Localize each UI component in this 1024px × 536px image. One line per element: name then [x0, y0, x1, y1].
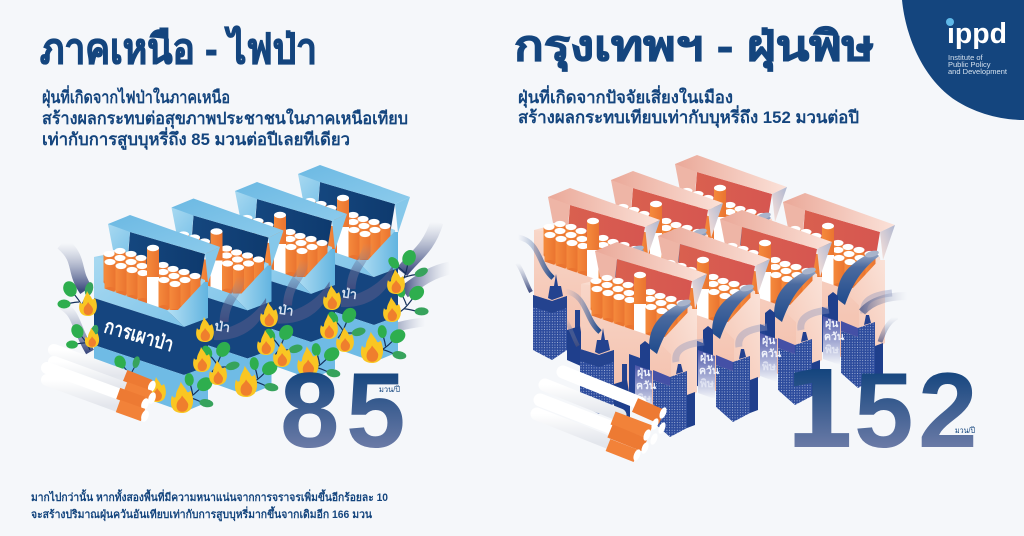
title: north: ภาคเหนือ - ไฟป่า [40, 25, 317, 72]
logo: ippd: Public Policy [948, 60, 991, 69]
number 152: 1 [782, 349, 856, 473]
logo: ippd: Institute of [948, 53, 984, 62]
illustration: forest fire cigarette packs [47, 165, 450, 423]
footnote: มากไปกว่านั้น หากทั้งสองพื้นที่มีความหนาแน่นจากการจราจรเพิ่มขึ้นอีกร้อยละ 10 [31, 489, 388, 504]
city pack front row 4 [752, 193, 895, 388]
logo: ippd: ippd [947, 18, 1007, 50]
pack label: การเผาป่า [102, 316, 176, 356]
cigarette pack 3 [221, 182, 347, 379]
smoke and label on pack 3 [277, 260, 330, 324]
city pack back row 1 [644, 155, 787, 350]
text block: bangkok description [518, 85, 859, 128]
footnote [31, 489, 388, 522]
loose cigarettes [47, 350, 157, 423]
smoke wisps right of city packs [862, 296, 907, 342]
number 152: 2 [918, 350, 978, 470]
footnote: จะสร้างปริมาณฝุ่นควันอันเทียบเท่ากับการสูบบุหรี่มากขึ้นจากเดิมอีก 166 มวน [31, 506, 372, 522]
text block: north description [42, 85, 408, 151]
smoke and label on pack 4 [341, 243, 393, 307]
text block: bangkok description: สร้างผลกระทบเทียบเท่ากับบุหรี่ถึง 152 มวนต่อปี [518, 105, 859, 128]
logo: ippd: and Development [948, 67, 1008, 76]
loose cigarettes [537, 372, 668, 462]
city pack front row 2 [627, 227, 770, 422]
logo: ippd [902, 0, 1024, 120]
cigarette pack 2 [158, 198, 284, 396]
text block: north description: เท่ากับการสูบบุหรี่ถึง 85 มวนต่อปีเลยทีเดียว [42, 127, 350, 151]
unit label 152: มวน/ปี [955, 426, 975, 435]
text block: north description: สร้างผลกระทบต่อสุขภาพประชาชนในภาคเหนือเทียบ [42, 108, 408, 129]
flames [79, 269, 405, 413]
smoke and label on pack 2 [214, 276, 266, 340]
city pack front row 1 [564, 242, 707, 437]
city pack front row 3 [689, 210, 832, 405]
smoke behind left packs [62, 222, 450, 352]
text block: bangkok description: ฝุ่นที่เกิดจากปัจจัยเสี่ยงในเมือง [518, 85, 733, 108]
cigarette pack 4 [284, 165, 410, 362]
number 152: 5 [854, 350, 914, 470]
branches [58, 242, 433, 411]
cigarette pack 1 [94, 215, 220, 412]
city pack back row 3 [517, 188, 660, 383]
number 85: 85 [280, 350, 406, 470]
unit label 85: มวน/ปี [379, 385, 400, 394]
illustration: city smog cigarette packs [517, 155, 907, 462]
title: bangkok: กรุงเทพฯ - ฝุ่นพิษ [514, 23, 874, 72]
city pack back row 2 [580, 171, 723, 366]
text block: north description: ฝุ่นที่เกิดจากไฟป่าในภาคเหนือ [42, 85, 230, 108]
